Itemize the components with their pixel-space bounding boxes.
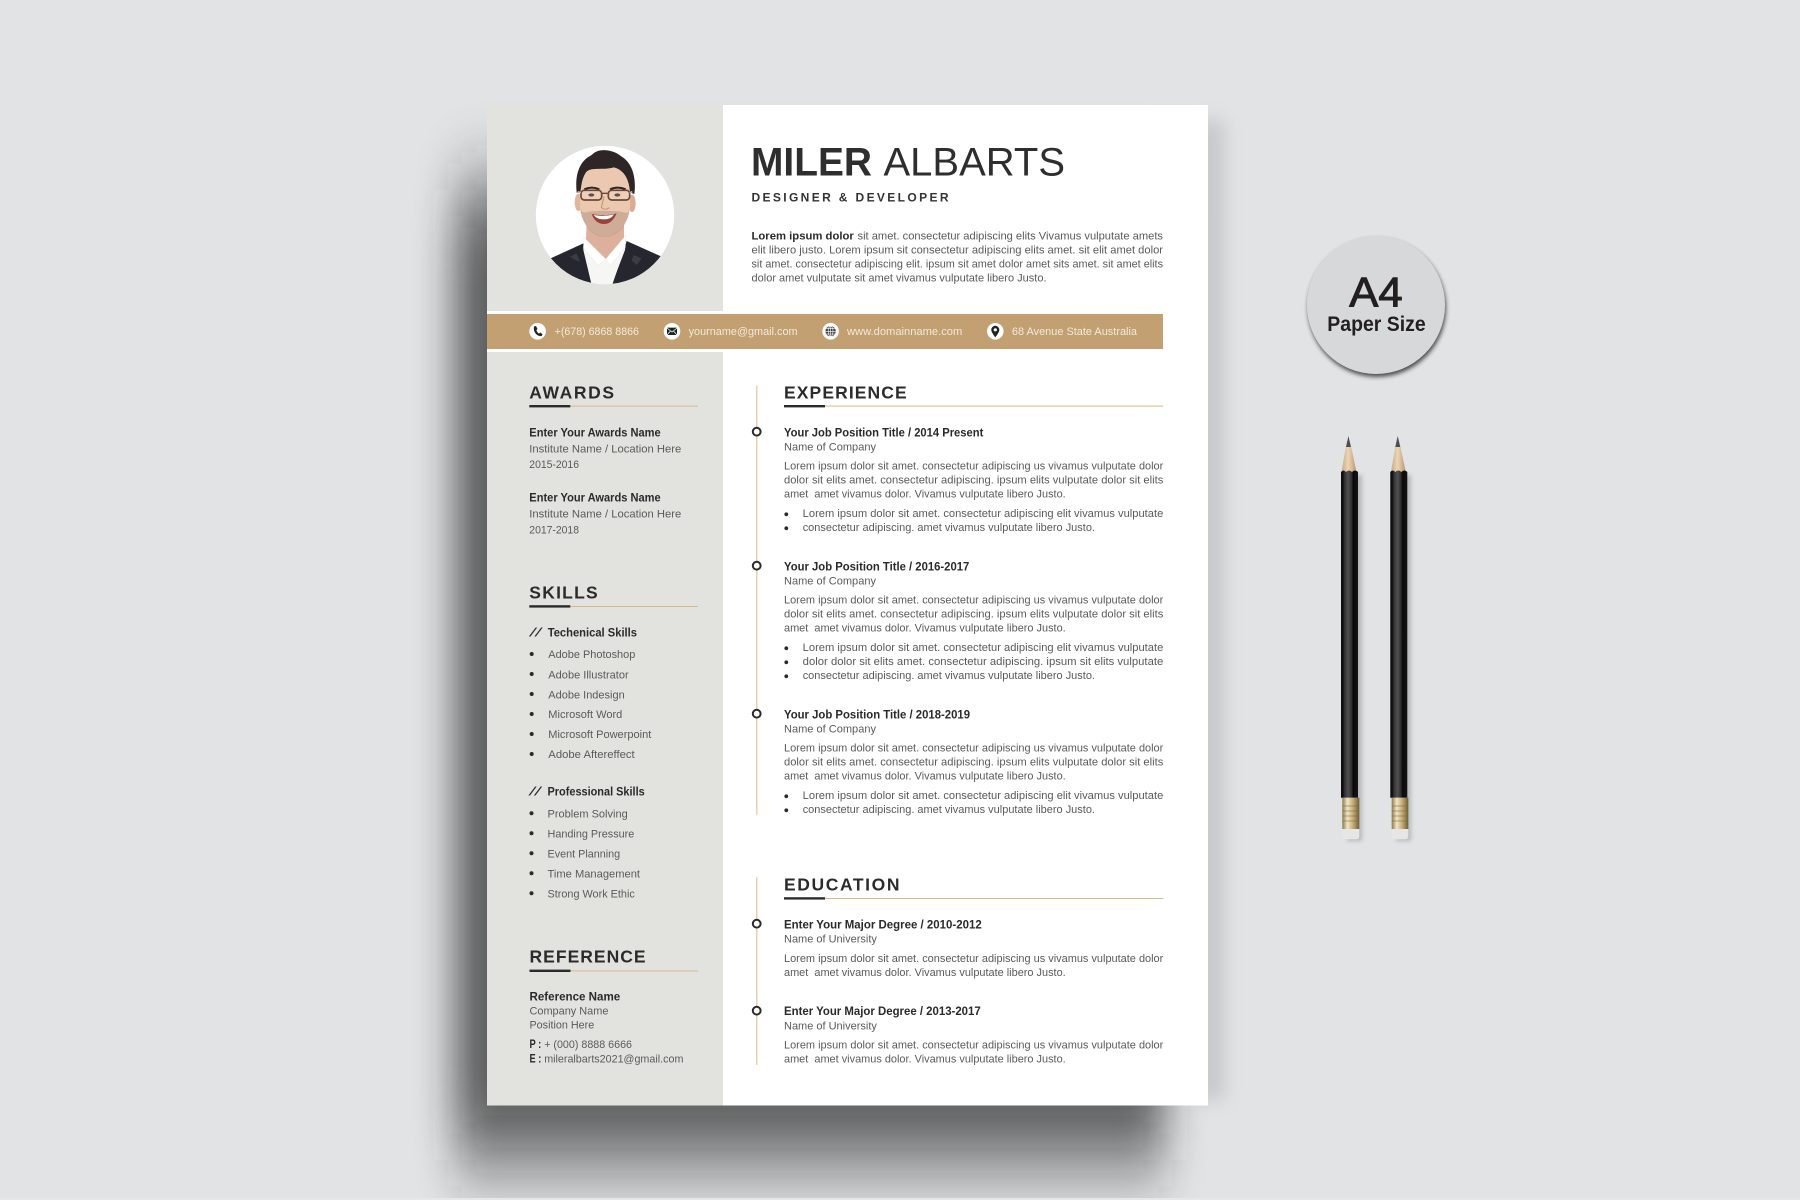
intro paragraph bbox=[752, 231, 1163, 285]
award one: Institute Name / Location Here bbox=[529, 443, 681, 455]
job two: Lorem ipsum dolor sit amet. consectetur adipiscing elit vivamus vulputate bbox=[803, 642, 1163, 654]
address: 68 Avenue State Australia bbox=[1012, 326, 1138, 338]
degree two: Lorem ipsum dolor sit amet. consectetur adipiscing us vivamus vulputate dolor bbox=[784, 1040, 1164, 1052]
reference details: + (000) 8888 6666 bbox=[544, 1039, 632, 1051]
degree one: Name of University bbox=[784, 934, 877, 946]
intro paragraph: elit libero justo. Lorem ipsum sit consectetur adipiscing elits amet. sit elit amet dolor bbox=[752, 245, 1163, 257]
award two: Enter Your Awards Name bbox=[529, 492, 661, 504]
job two: dolor dolor sit elits amet. consectetur adipiscing. ipsum sit elits vulputate bbox=[803, 656, 1163, 668]
degree one: amet amet vivamus dolor. Vivamus vulputate libero Justo. bbox=[784, 967, 1066, 979]
job two: Name of Company bbox=[784, 575, 876, 587]
website: www.domainname.com bbox=[846, 326, 962, 338]
skills rule bbox=[529, 605, 698, 608]
job three: amet amet vivamus dolor. Vivamus vulputate libero Justo. bbox=[784, 771, 1066, 783]
technical skills bbox=[528, 627, 651, 761]
reference details bbox=[530, 991, 683, 1065]
degree one bbox=[784, 919, 1164, 979]
reference heading: REFERENCE bbox=[530, 947, 646, 967]
award one bbox=[529, 427, 681, 471]
professional skills: // bbox=[528, 787, 544, 799]
job two bbox=[784, 561, 1164, 682]
technical skills: Adobe Photoshop bbox=[548, 649, 635, 661]
intro paragraph: sit amet. consectetur adipiscing elit. ipsum sit amet dolor amet sits amet. sit amet elits bbox=[752, 259, 1163, 271]
job one: dolor sit elits amet. consectetur adipiscing. ipsum elits vulputate dolor sit elits bbox=[784, 475, 1164, 487]
intro paragraph: dolor amet vulputate sit amet vivamus vulputate libero Justo. bbox=[752, 273, 1046, 285]
job one: Lorem ipsum dolor sit amet. consectetur adipiscing elit vivamus vulputate bbox=[803, 508, 1163, 520]
email: yourname@gmail.com bbox=[689, 326, 798, 338]
degree two bbox=[784, 1006, 1164, 1066]
technical skills: Adobe Illustrator bbox=[548, 669, 629, 681]
icon: mail bbox=[664, 323, 680, 340]
intro paragraph: sit amet. consectetur adipiscing elits Vivamus vulputate amets bbox=[858, 231, 1163, 243]
job one: consectetur adipiscing. amet vivamus vulputate libero Justo. bbox=[803, 522, 1095, 534]
award two bbox=[529, 492, 681, 536]
reference rule bbox=[530, 970, 698, 972]
pencil one bbox=[1341, 436, 1362, 841]
section: awards bbox=[529, 383, 698, 536]
job three: Your Job Position Title / 2018-2019 bbox=[784, 709, 970, 721]
technical skills: Microsoft Word bbox=[548, 709, 622, 721]
professional skills: Handing Pressure bbox=[548, 828, 634, 840]
profile photo bbox=[535, 145, 675, 290]
name: ALBARTS bbox=[884, 140, 1065, 184]
education timeline bbox=[753, 877, 761, 1065]
job three: Lorem ipsum dolor sit amet. consectetur adipiscing us vivamus vulputate dolor bbox=[784, 743, 1164, 755]
technical skills: Adobe Aftereffect bbox=[548, 749, 635, 761]
phone number: +(678) 6868 8866 bbox=[555, 326, 639, 338]
job one: Lorem ipsum dolor sit amet. consectetur adipiscing us vivamus vulputate dolor bbox=[784, 461, 1164, 473]
degree one: Lorem ipsum dolor sit amet. consectetur adipiscing us vivamus vulputate dolor bbox=[784, 953, 1164, 965]
section: experience bbox=[753, 383, 1164, 816]
award one: 2015-2016 bbox=[529, 459, 579, 471]
resume page bbox=[487, 105, 1208, 1106]
degree one: Enter Your Major Degree / 2010-2012 bbox=[784, 919, 982, 931]
section: education bbox=[753, 874, 1164, 1066]
education heading: EDUCATION bbox=[784, 874, 900, 894]
sidebar lower panel bbox=[487, 352, 723, 1106]
job three: Name of Company bbox=[784, 723, 876, 735]
name: MILER bbox=[751, 140, 872, 184]
award two: 2017-2018 bbox=[529, 524, 579, 536]
skills heading: SKILLS bbox=[529, 583, 598, 603]
job two: Lorem ipsum dolor sit amet. consectetur adipiscing us vivamus vulputate dolor bbox=[784, 595, 1164, 607]
experience rule bbox=[784, 405, 1163, 407]
professional skills: Strong Work Ethic bbox=[548, 888, 635, 900]
contact band bbox=[487, 314, 1163, 349]
name bbox=[751, 140, 1065, 184]
award two: Institute Name / Location Here bbox=[529, 508, 681, 520]
job two: amet amet vivamus dolor. Vivamus vulputate libero Justo. bbox=[784, 623, 1066, 635]
icon: location pin bbox=[987, 323, 1004, 340]
job one: Name of Company bbox=[784, 441, 876, 453]
pencil two bbox=[1390, 436, 1411, 841]
degree two: Name of University bbox=[784, 1020, 877, 1032]
professional skills: Time Management bbox=[548, 868, 640, 880]
technical skills: Adobe Indesign bbox=[548, 689, 625, 701]
reference details: E : bbox=[530, 1053, 541, 1065]
reference details: Position Here bbox=[530, 1019, 594, 1031]
reference details: Company Name bbox=[530, 1005, 608, 1017]
job two: Your Job Position Title / 2016-2017 bbox=[784, 561, 969, 573]
section: reference bbox=[530, 947, 698, 1065]
paper sheet bbox=[487, 105, 1208, 1106]
reference details: Reference Name bbox=[530, 991, 620, 1003]
sidebar top panel bbox=[487, 105, 723, 311]
degree two: amet amet vivamus dolor. Vivamus vulputate libero Justo. bbox=[784, 1054, 1066, 1066]
badge: A4 paper size bbox=[1307, 236, 1446, 377]
badge: A4 paper size: Paper Size bbox=[1327, 313, 1426, 336]
experience timeline bbox=[753, 385, 761, 815]
reference details: mileralbarts2021@gmail.com bbox=[544, 1053, 683, 1065]
degree two: Enter Your Major Degree / 2013-2017 bbox=[784, 1006, 981, 1018]
job one: amet amet vivamus dolor. Vivamus vulputate libero Justo. bbox=[784, 489, 1066, 501]
job two: consectetur adipiscing. amet vivamus vulputate libero Justo. bbox=[803, 670, 1095, 682]
job one bbox=[784, 427, 1164, 534]
education rule bbox=[784, 897, 1163, 900]
job one: Your Job Position Title / 2014 Present bbox=[784, 427, 983, 439]
professional skills bbox=[528, 787, 645, 900]
technical skills: Microsoft Powerpoint bbox=[548, 729, 651, 741]
job two: dolor sit elits amet. consectetur adipiscing. ipsum elits vulputate dolor sit elits bbox=[784, 609, 1164, 621]
section: skills bbox=[528, 583, 698, 900]
reference details: P : bbox=[530, 1039, 541, 1051]
professional skills: Event Planning bbox=[548, 848, 620, 860]
job title: DESIGNER & DEVELOPER bbox=[752, 191, 949, 205]
professional skills: Problem Solving bbox=[548, 808, 628, 820]
technical skills: // bbox=[528, 627, 544, 639]
badge: A4 paper size: A4 bbox=[1349, 268, 1403, 316]
job three bbox=[784, 709, 1164, 816]
award one: Enter Your Awards Name bbox=[529, 427, 661, 439]
technical skills: Techenical Skills bbox=[548, 627, 637, 639]
experience heading: EXPERIENCE bbox=[784, 383, 907, 403]
professional skills: Professional Skills bbox=[548, 787, 645, 799]
icon: phone bbox=[529, 323, 546, 340]
job three: Lorem ipsum dolor sit amet. consectetur adipiscing elit vivamus vulputate bbox=[803, 790, 1163, 802]
job three: dolor sit elits amet. consectetur adipiscing. ipsum elits vulputate dolor sit elits bbox=[784, 757, 1164, 769]
icon: globe bbox=[822, 323, 839, 340]
job three: consectetur adipiscing. amet vivamus vulputate libero Justo. bbox=[803, 804, 1095, 816]
awards rule bbox=[529, 405, 698, 407]
awards heading: AWARDS bbox=[529, 383, 614, 403]
intro paragraph: Lorem ipsum dolor bbox=[752, 231, 855, 243]
